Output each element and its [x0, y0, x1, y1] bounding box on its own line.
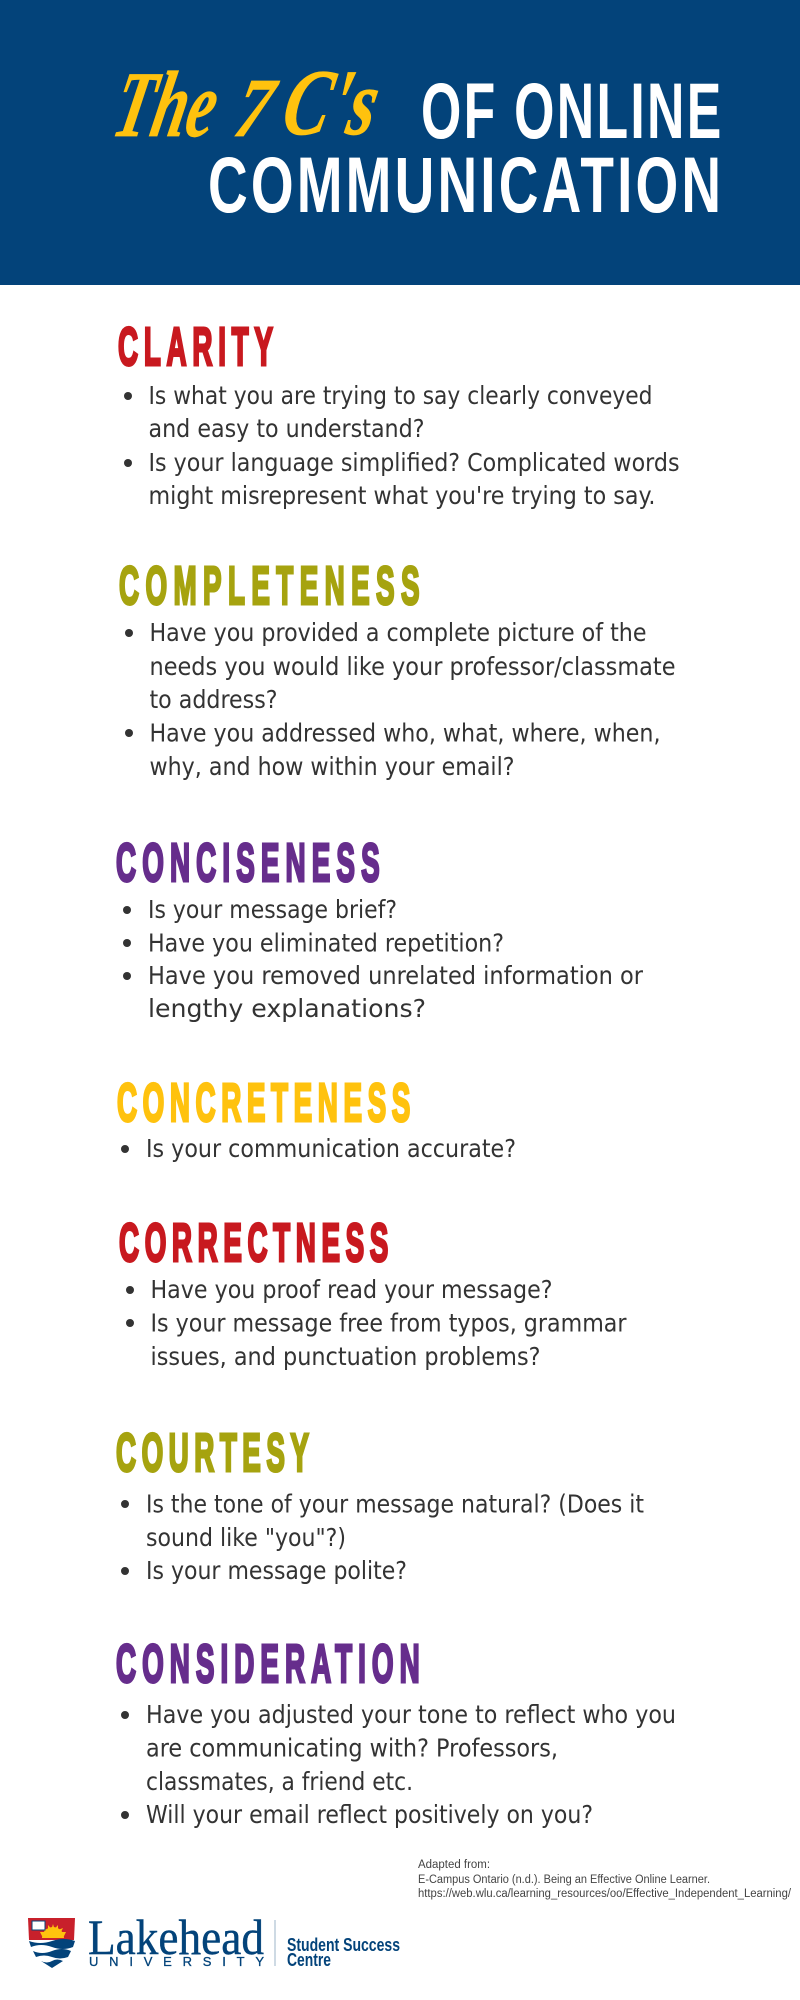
- heading: consideration: CONSIDERATION: [116, 1634, 420, 1695]
- panel: courtesy: [116, 1423, 644, 1585]
- citation: Adapted from:: [418, 1859, 490, 1871]
- header banner: [0, 0, 800, 285]
- title script: The 7 C's: The: [106, 52, 228, 157]
- department name: [287, 1935, 400, 1970]
- panel: clarity: [118, 317, 680, 510]
- bullet list: consideration: Will your email reflect positively on you?: [146, 1800, 593, 1829]
- title script: The 7 C's: C's: [275, 50, 389, 155]
- panel: completeness: [119, 556, 676, 781]
- bullet list: clarity: [124, 381, 680, 510]
- citation: [418, 1859, 792, 1900]
- bullet list: consideration: are communicating with? Professors,: [146, 1734, 558, 1762]
- heading: correctness: CORRECTNESS: [119, 1213, 388, 1274]
- department name: Student Success: [287, 1935, 400, 1955]
- bullet list: clarity: might misrepresent what you're trying to say.: [148, 481, 656, 510]
- wordmark: University: UNIVERSITY: [89, 1954, 264, 1969]
- bullet list: completeness: to address?: [150, 685, 278, 714]
- heading: completeness: COMPLETENESS: [119, 556, 420, 617]
- bullet list: correctness: issues, and punctuation problems?: [150, 1342, 540, 1371]
- heading: conciseness: CONCISENESS: [116, 833, 380, 894]
- panel: correctness: [119, 1213, 627, 1371]
- bullet list: consideration: [121, 1700, 676, 1829]
- icon: university shield: [28, 1918, 75, 1968]
- bullet list: correctness: [126, 1275, 627, 1371]
- bullet list: courtesy: Is your message polite?: [146, 1556, 407, 1585]
- title script: The 7 C's: [106, 50, 389, 157]
- bullet list: clarity: Is your language simplified? Complicated words: [148, 448, 680, 477]
- bullet list: conciseness: lengthy explanations?: [148, 994, 426, 1023]
- title line 2: COMMUNICATION: [208, 142, 721, 229]
- bullet list: concreteness: Is your communication accurate?: [146, 1134, 516, 1163]
- bullet list: correctness: Have you proof read your message?: [150, 1275, 552, 1304]
- panel: conciseness: [116, 833, 644, 1023]
- bullet list: correctness: Is your message free from typos, grammar: [150, 1308, 627, 1338]
- bullet list: completeness: [125, 618, 676, 781]
- bullet list: consideration: classmates, a friend etc.: [146, 1767, 413, 1796]
- heading: concreteness: CONCRETENESS: [117, 1073, 410, 1134]
- bullet list: clarity: and easy to understand?: [148, 414, 424, 443]
- heading: courtesy: COURTESY: [116, 1423, 309, 1484]
- bullet list: consideration: Have you adjusted your tone to reflect who you: [146, 1700, 676, 1729]
- bullet list: courtesy: [121, 1490, 644, 1585]
- bullet list: completeness: needs you would like your professor/classmate: [150, 652, 676, 681]
- bullet list: conciseness: Have you eliminated repetition?: [148, 928, 504, 958]
- bullet list: conciseness: Have you removed unrelated information or: [148, 961, 644, 990]
- bullet list: completeness: Have you provided a complete picture of the: [150, 618, 646, 647]
- citation: https://web.wlu.ca/learning_resources/oo/Effective_Independent_Learning/: [418, 1888, 792, 1900]
- title script: The 7 C's: 7: [228, 62, 285, 155]
- panel: concreteness: [117, 1073, 516, 1163]
- panel: consideration: [116, 1634, 676, 1829]
- title line 1: OF ONLINE: [421, 68, 721, 156]
- wordmark: Lakehead: Lakehead: [88, 1909, 264, 1965]
- bullet list: conciseness: Is your message brief?: [148, 895, 397, 924]
- bullet list: completeness: why, and how within your email?: [150, 752, 514, 781]
- department name: Centre: [287, 1950, 331, 1970]
- bullet list: clarity: Is what you are trying to say clearly conveyed: [148, 381, 652, 410]
- heading: clarity: CLARITY: [118, 317, 273, 378]
- logo: Lakehead University Student Success Centre: [28, 1909, 400, 1970]
- citation: E-Campus Ontario (n.d.). Being an Effective Online Learner.: [418, 1874, 710, 1886]
- bullet list: courtesy: sound like "you"?): [146, 1523, 346, 1552]
- bullet list: conciseness: [123, 895, 644, 1023]
- bullet list: courtesy: Is the tone of your message natural? (Does it: [146, 1490, 644, 1518]
- bullet list: completeness: Have you addressed who, what, where, when,: [150, 718, 660, 748]
